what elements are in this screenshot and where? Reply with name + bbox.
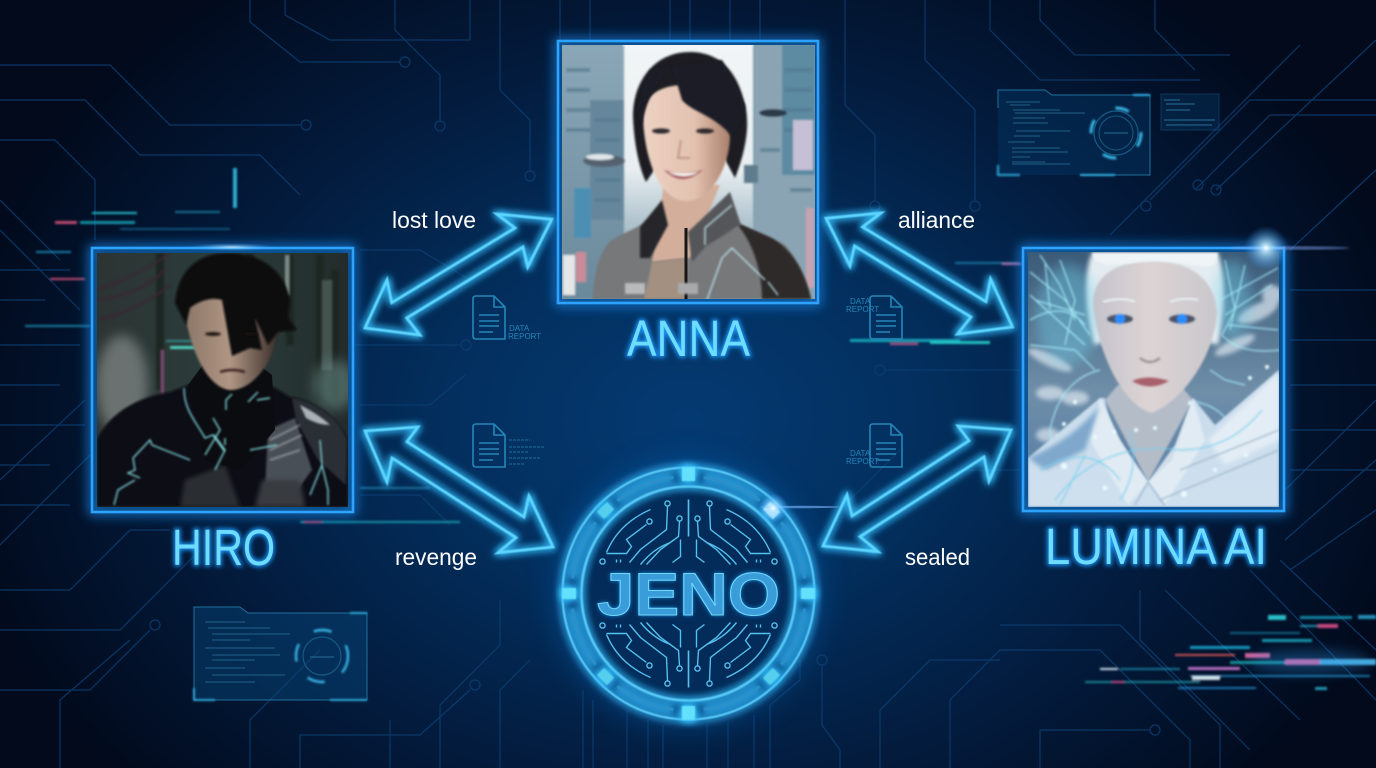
icon: document bottom right: DATA <box>850 449 871 458</box>
Anna fringe <box>672 60 745 136</box>
Anna flying vehicle right <box>759 109 787 117</box>
HUD panel: upper right <box>998 90 1219 205</box>
Anna jacket dark side <box>735 222 811 299</box>
Anna hair back <box>633 52 747 182</box>
label: alliance: alliance <box>898 207 975 233</box>
name: LUMINA AI: LUMINA AI <box>1045 518 1267 575</box>
Lumina bokeh <box>1026 285 1282 442</box>
Hiro scene <box>96 253 357 507</box>
Anna city scene <box>562 45 815 300</box>
Hiro steam left <box>96 335 148 435</box>
Anna frame glow <box>558 41 818 303</box>
Lumina face <box>1093 261 1217 413</box>
Hiro eyes <box>205 332 221 336</box>
arrow: Anna to Lumina <box>826 213 1012 334</box>
Hiro armor <box>97 380 348 507</box>
icon: document bottom right <box>846 424 902 467</box>
Lumina brows <box>1103 298 1198 302</box>
Hiro frame <box>92 248 353 512</box>
icon: document bottom right: REPORT <box>846 457 879 466</box>
Anna jacket <box>593 220 811 299</box>
logo: Jeno emblem <box>562 467 815 720</box>
arrow: Hiro to Anna <box>365 214 552 335</box>
Anna eyes <box>652 128 670 134</box>
flare: Hiro frame top <box>187 243 277 251</box>
Anna smile <box>664 170 703 179</box>
icon: document top right: DATA <box>850 297 871 306</box>
label: revenge: revenge <box>395 544 477 570</box>
Anna neck <box>652 185 720 262</box>
emblem disc <box>562 468 814 720</box>
data streaks: right of Anna <box>300 262 1022 523</box>
Anna nose shadow <box>678 140 690 158</box>
Lumina lips <box>1132 378 1169 386</box>
icon: document bottom left <box>473 424 545 467</box>
Lumina hair <box>1086 253 1224 345</box>
Lumina kimono <box>1028 370 1279 507</box>
name: ANNA: ANNA <box>627 310 750 367</box>
Lumina glow filaments <box>1036 265 1100 365</box>
Anna flying vehicle left <box>583 155 625 167</box>
Hiro mouth <box>220 370 245 372</box>
icon: document top right <box>846 296 902 339</box>
emblem wordmark: JENO <box>597 561 780 628</box>
Anna face <box>643 85 730 201</box>
name: LUMINA AI: LUMINA AI <box>1045 518 1267 575</box>
Hiro steam right <box>313 360 357 410</box>
Anna collar left <box>640 200 668 258</box>
icon: document top right: REPORT <box>846 305 879 314</box>
flare: Lumina frame corner <box>1230 226 1350 270</box>
label: lost love: lost love <box>392 207 476 233</box>
Hiro hair <box>175 253 297 356</box>
emblem wordmark: JENO <box>597 561 780 628</box>
Lumina nose <box>1140 358 1160 362</box>
emblem circuit traces <box>600 500 777 688</box>
panel: Hiro portrait <box>92 248 357 512</box>
center glow behind logo <box>553 459 823 729</box>
HUD panel: lower left <box>194 607 367 700</box>
Lumina scene <box>1026 252 1282 507</box>
panel: Lumina portrait <box>1023 248 1284 511</box>
icon: document top left <box>473 296 541 341</box>
Lumina filaments <box>1028 254 1279 438</box>
Lumina sparkles <box>1061 365 1269 497</box>
icon: document top left: DATA <box>509 324 530 333</box>
Hiro face <box>184 288 276 390</box>
Hiro frame glow <box>92 248 353 512</box>
Lumina frame <box>1023 248 1284 511</box>
Lumina neck <box>1105 385 1193 482</box>
Lumina frame glow <box>1023 248 1284 511</box>
Anna collar right <box>688 192 741 262</box>
flare: Jeno emblem <box>758 493 840 523</box>
name: HIRO: HIRO <box>172 519 275 576</box>
name: HIRO: HIRO <box>172 519 275 576</box>
label: sealed: sealed <box>905 544 970 570</box>
Hiro neon armor lines <box>114 388 328 505</box>
arrow: Lumina to Jeno <box>823 426 1011 552</box>
Lumina eyes <box>1107 314 1133 324</box>
panel: Anna portrait <box>558 41 818 303</box>
data streaks: upper left <box>25 168 237 327</box>
emblem nodes <box>562 467 815 720</box>
soft glow lower right <box>1250 650 1370 674</box>
arrow: Hiro to Jeno <box>365 427 553 553</box>
data streaks: lower right <box>1085 615 1376 690</box>
icon: document top left: REPORT <box>508 332 541 341</box>
Hiro collar <box>188 362 275 470</box>
Anna neon trim <box>705 205 778 300</box>
Anna inner shirt <box>644 258 688 299</box>
Anna frame <box>558 41 818 303</box>
name: ANNA: ANNA <box>627 310 750 367</box>
emblem rings <box>562 468 814 720</box>
